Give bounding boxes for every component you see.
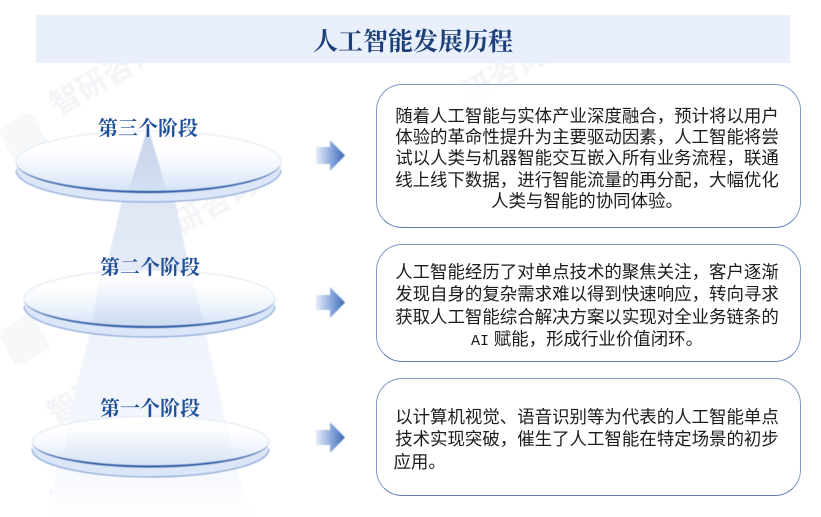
- watermark: 智研咨询: [142, 167, 262, 256]
- text box: stage 3: 随着人工智能与实体产业深度融合，预计将以用户: [395, 106, 779, 126]
- beam below disc 1: [46, 447, 252, 517]
- text box: stage 1: 技术实现突破，催生了人工智能在特定场景的初步: [395, 429, 779, 449]
- beam between disc 3 and disc 2: [94, 200, 200, 320]
- text box: stage 3: [376, 84, 801, 228]
- text box: stage 2: 发现自身的复杂需求难以得到快速响应，转向寻求: [395, 284, 779, 304]
- text box: stage 3: 线上线下数据，进行智能流量的再分配，大幅优化: [395, 170, 779, 190]
- label: stage 1: 第一个阶段: [100, 398, 200, 420]
- text box: stage 3: 体验的革命性提升为主要驱动因素，人工智能将尝: [395, 127, 779, 147]
- disc 3: [16, 127, 281, 202]
- title: 人工智能发展历程: [313, 29, 513, 56]
- text box: stage 3: 试以人类与机器智能交互嵌入所有业务流程，联通: [395, 148, 779, 168]
- label: stage 2: 第二个阶段: [100, 257, 200, 279]
- disc 1: [32, 416, 269, 477]
- text box: stage 1: 应用。: [394, 452, 446, 472]
- arrow 3: [316, 140, 345, 171]
- beam between disc 2 and disc 1: [60, 325, 232, 450]
- arrow 2: [316, 287, 345, 318]
- text box: stage 3: 人类与智能的协同体验。: [491, 191, 683, 211]
- title: [36, 15, 790, 63]
- watermark: [0, 33, 551, 517]
- text box: stage 2: 获取人工智能综合解决方案以实现对全业务链条的: [395, 306, 779, 326]
- watermark: 智研咨询: [45, 33, 165, 122]
- watermark: 研咨询: [457, 37, 551, 111]
- text box: stage 2: 人工智能经历了对单点技术的聚焦关注，客户逐渐: [395, 262, 779, 282]
- text box: stage 1: [376, 378, 801, 496]
- disc 2: [24, 270, 275, 337]
- watermark: 智研: [42, 372, 110, 431]
- text box: stage 2: [376, 244, 801, 362]
- arrow 1: [316, 422, 345, 453]
- text box: stage 1: 以计算机视觉、语音识别等为代表的人工智能单点: [395, 407, 779, 427]
- text box: stage 2: AI 赋能，形成行业价值闭环。: [471, 329, 703, 350]
- label: stage 3: 第三个阶段: [98, 118, 198, 140]
